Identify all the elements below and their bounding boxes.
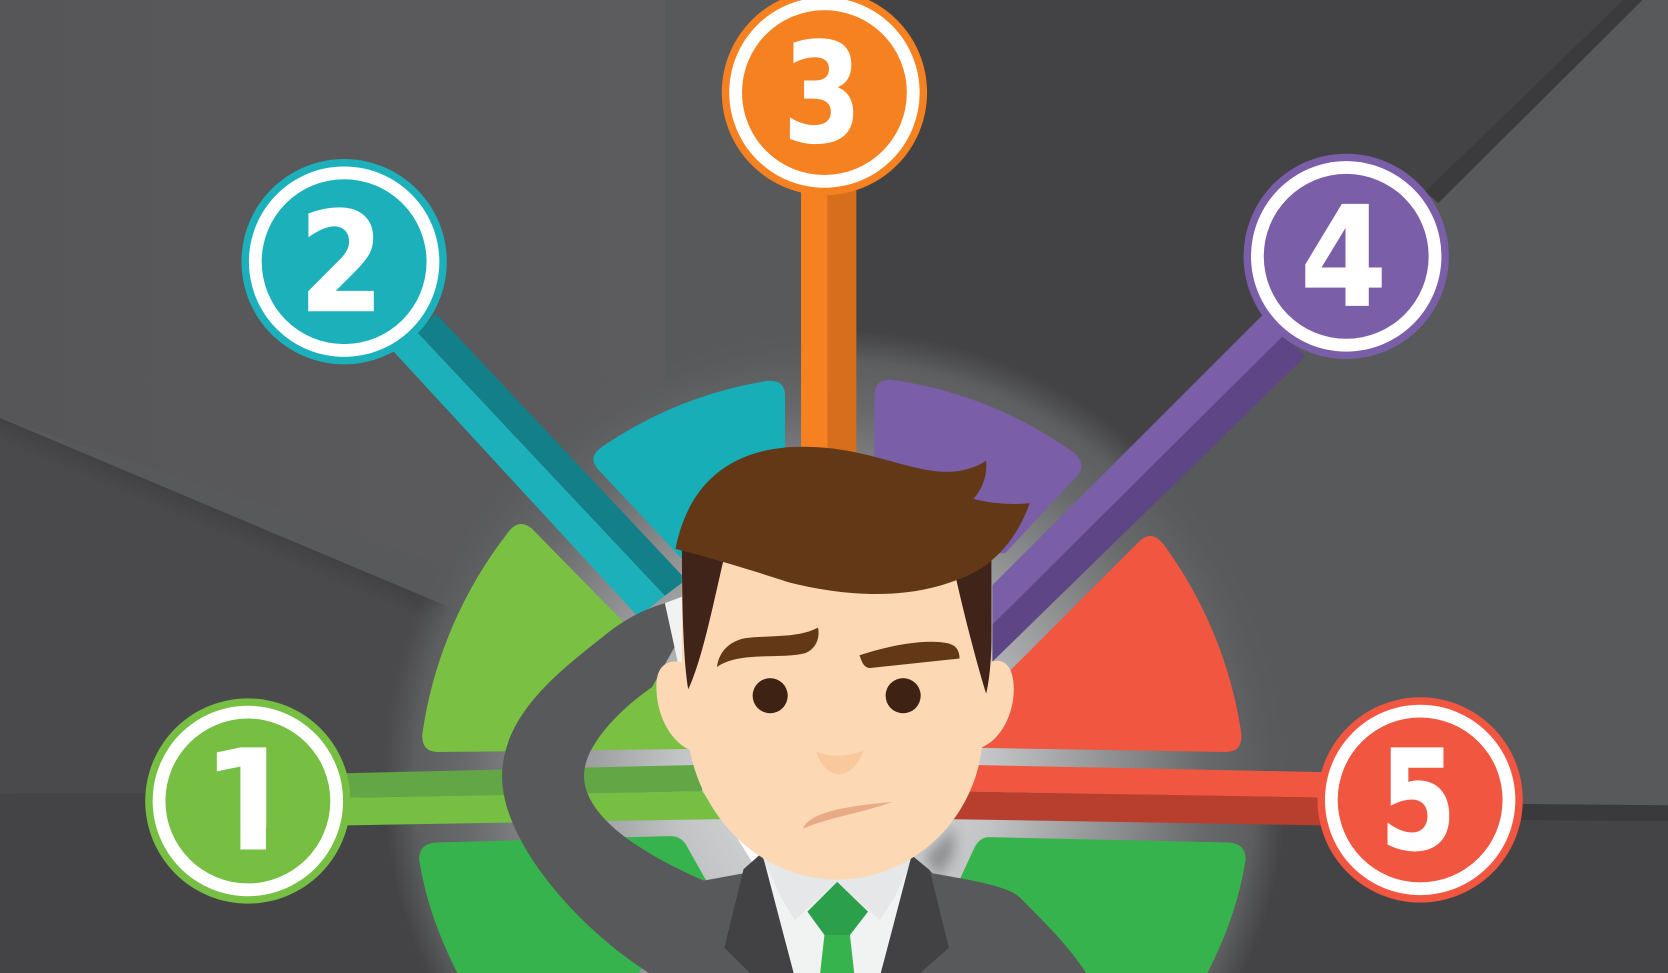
connector 5: red — [947, 765, 1330, 825]
badge 5: 5 — [1380, 721, 1457, 882]
raised arm sleeve — [502, 599, 766, 973]
left eyebrow — [717, 628, 819, 667]
segment: dark green left — [419, 836, 711, 973]
left sideburn — [682, 548, 723, 689]
segment: dark green right — [947, 837, 1246, 973]
left lapel — [724, 853, 794, 973]
left ear — [656, 661, 702, 750]
segment: teal — [593, 381, 785, 569]
mouth — [803, 802, 893, 829]
badge 2: 2 — [299, 182, 384, 344]
tie knot — [807, 882, 868, 935]
connector 2: teal — [388, 314, 686, 617]
badge 4 — [1244, 154, 1449, 359]
segment: purple — [874, 380, 1081, 553]
right sideburn — [956, 558, 991, 694]
wheel segments — [419, 380, 1246, 973]
badge 2 — [241, 159, 447, 364]
hair — [675, 447, 1030, 594]
badge 1 — [145, 698, 351, 904]
segment: light green — [422, 524, 702, 752]
man figure — [502, 447, 1086, 973]
white neck sliver — [734, 833, 764, 864]
connector 1: green — [340, 765, 723, 825]
tie blade — [820, 935, 854, 973]
badge 5 — [1317, 697, 1523, 903]
connector 4: purple — [993, 315, 1305, 662]
right lapel — [881, 855, 949, 973]
connector 3: orange — [801, 181, 856, 463]
shirt — [762, 851, 915, 973]
badge 1: 1 — [202, 721, 298, 882]
nose — [816, 750, 864, 774]
shirt cuff — [665, 597, 686, 668]
right eyebrow — [860, 642, 960, 668]
face — [682, 553, 991, 880]
collar — [762, 855, 915, 920]
badge 3 — [722, 0, 927, 195]
jacket body — [638, 853, 1086, 973]
right ear — [973, 661, 1014, 748]
badge 3: 3 — [783, 14, 862, 174]
segment: red — [979, 536, 1241, 752]
badge 4: 4 — [1300, 178, 1387, 339]
right eye — [886, 678, 921, 713]
left eye — [753, 678, 788, 713]
neck shadow — [923, 824, 954, 878]
radial glow behind the wheel — [383, 330, 1287, 973]
